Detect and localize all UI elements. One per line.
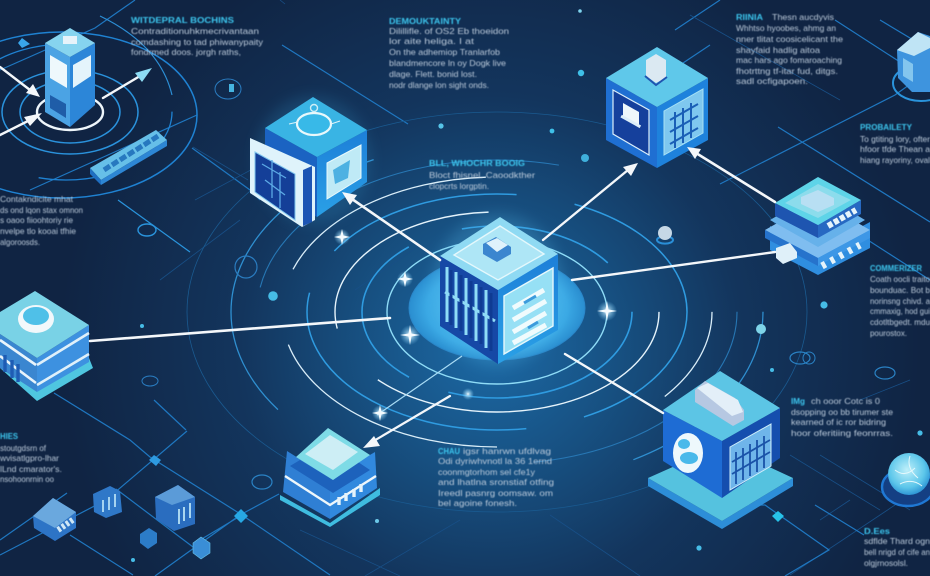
text: top-right block: sadl ocfigapoen. <box>736 76 808 86</box>
text: lower-centre block: and lhatlna sronstiaf otfing <box>438 477 554 487</box>
rings around top-left tower <box>0 16 197 198</box>
text: top-centre block <box>389 16 509 90</box>
text: top-centre block: On the adhemiop Tranlarfob <box>389 47 500 57</box>
text: lower-centre block: Ireedl pasnrg oomsaw. om <box>438 488 553 498</box>
text: top-right block: Thesn aucdyvis <box>772 12 834 22</box>
text: top-left block <box>131 15 264 57</box>
text: top-left block: WITDEPRAL BOCHINS <box>131 15 234 25</box>
text: lower-right block: dsopping oo bb tirumer ste <box>791 407 893 417</box>
text: lower-right block: hoor oferitiing feonrras. <box>791 428 893 438</box>
glow: central cube <box>432 214 564 366</box>
text: top-centre block: Dilillifle. of OS2 Eb thoeidon <box>389 26 509 36</box>
text: lower-right block: IMg <box>791 396 805 406</box>
text: left block <box>0 194 83 247</box>
text: lower-centre block: igsr hanrwn ufdlvag <box>463 446 551 456</box>
text: right commerce block <box>870 263 930 338</box>
text: lower-centre block: Odi dyriwhvnotl la 36 1ernd <box>438 456 552 466</box>
text: lower-centre block: CHAU <box>438 446 460 456</box>
icon: small grid cubes <box>33 485 210 559</box>
text: top-right block <box>736 12 843 86</box>
text: lower-right block: kearned of ic ror bidring <box>791 417 886 427</box>
icon: globe <box>882 453 930 506</box>
text: top-left block: comdashing to tad phiwanypaity <box>131 37 264 47</box>
text: top-right block: Whhtso hyoobes, ahmg an <box>736 23 836 33</box>
text: top-right block: fhotrttng tf-itar fud, ditgs. <box>736 66 838 76</box>
icon: central cube <box>440 217 558 364</box>
text: top-right block: nner tlitat coosicelicant the <box>736 34 843 44</box>
text: top-centre block: DEMOUKTAINTY <box>389 16 461 26</box>
text: right commerce block: bounduac. Bot b <box>870 285 930 295</box>
sparkle highlights <box>334 229 617 421</box>
text: centre block: Bloct fhisnel. Caoodkther <box>429 170 535 180</box>
text: lower-left block: HIES <box>0 431 18 441</box>
icon: lower-right cube on base <box>648 371 793 529</box>
text: right probability block: hiang rayoriny, oval <box>860 155 930 165</box>
icon: ridged server bar <box>90 130 167 185</box>
text: left block: Contakndicite mhat <box>0 194 74 204</box>
concentric rings around central platform <box>187 112 807 512</box>
text: left block: algoroosds. <box>0 237 40 247</box>
text: lower-right block: ch ooor Cotc is 0 <box>811 396 880 406</box>
text: left block: nvelpe tlo kooai tfhie <box>0 226 76 236</box>
text: right probability block: PROBAILETY <box>860 122 912 132</box>
text: left block: s oaoo fiioohtoriy rie <box>0 215 73 225</box>
text: centre block: clopcrts lorgptin. <box>429 181 489 191</box>
text: lower-centre block: bel agoine fonesh. <box>438 498 517 508</box>
text: bottom-right block <box>864 526 930 568</box>
text: right probability block: To gtiting lory, ofter <box>860 134 930 144</box>
text: top-left block: fondrmed doos. jorgh raths, <box>131 47 241 57</box>
text: right commerce block: COMMERIZER <box>870 263 923 273</box>
text: lower-left block: wvisatlgpro-lhar <box>0 453 59 463</box>
icon: left building <box>0 291 93 401</box>
text: top-centre block: lor aite heliga. I at <box>389 36 475 46</box>
text: right commerce block: pourostox. <box>870 328 907 338</box>
text: centre block: BLL, WHOCHR BOOIG <box>429 158 525 168</box>
text: lower-right block <box>791 396 893 438</box>
central platform <box>409 256 585 360</box>
text: right probability block: hfoor tfde Thean a <box>860 144 930 154</box>
text: lower-left block: nsohoonrnin oo <box>0 474 54 484</box>
text: top-left block: Contraditionuhkmecrivantaan <box>131 26 259 36</box>
arrows: connectors to central hub <box>90 147 775 448</box>
icon: top-left tower <box>45 28 95 127</box>
text: centre block <box>429 158 535 191</box>
text: top-right block: shayfaid hadlig aitoa <box>736 45 820 55</box>
text: right probability block <box>860 122 930 165</box>
text: top-right block: RIINIA <box>736 12 763 22</box>
arrows: tower connections <box>0 38 152 135</box>
text: lower-centre block <box>438 446 554 508</box>
text: top-centre block: dlage. Flett. bonid lost. <box>389 69 477 79</box>
icon: upper-left cube <box>250 96 371 227</box>
text: top-right block: mac hars ago fomaroaching <box>736 55 842 65</box>
text: lower-left block <box>0 431 62 484</box>
text: left block: ds ond lqon stax omnon <box>0 205 83 215</box>
text: bottom-right block: D.Ees <box>864 526 890 536</box>
text: top-centre block: blandmencore ln oy Dogk live <box>389 58 506 68</box>
text: lower-centre block: coonmgtorhom sel cfe1y <box>438 467 536 477</box>
text: lower-left block: lLnd cmarator's. <box>0 464 62 474</box>
text: bottom-right block: sdflde Thard ogn <box>864 536 930 546</box>
icon: top-right cylinder <box>893 32 930 101</box>
text: lower-left block: stoutgdsrn of <box>0 443 47 453</box>
text: top-centre block: nodr dlange lon sight onds. <box>389 80 489 90</box>
text: bottom-right block: olgjrnosolsl. <box>864 558 908 568</box>
icon: lower-centre building <box>280 428 380 527</box>
icon: upper-right cube <box>606 47 708 168</box>
icon: stacked building right <box>765 177 870 275</box>
